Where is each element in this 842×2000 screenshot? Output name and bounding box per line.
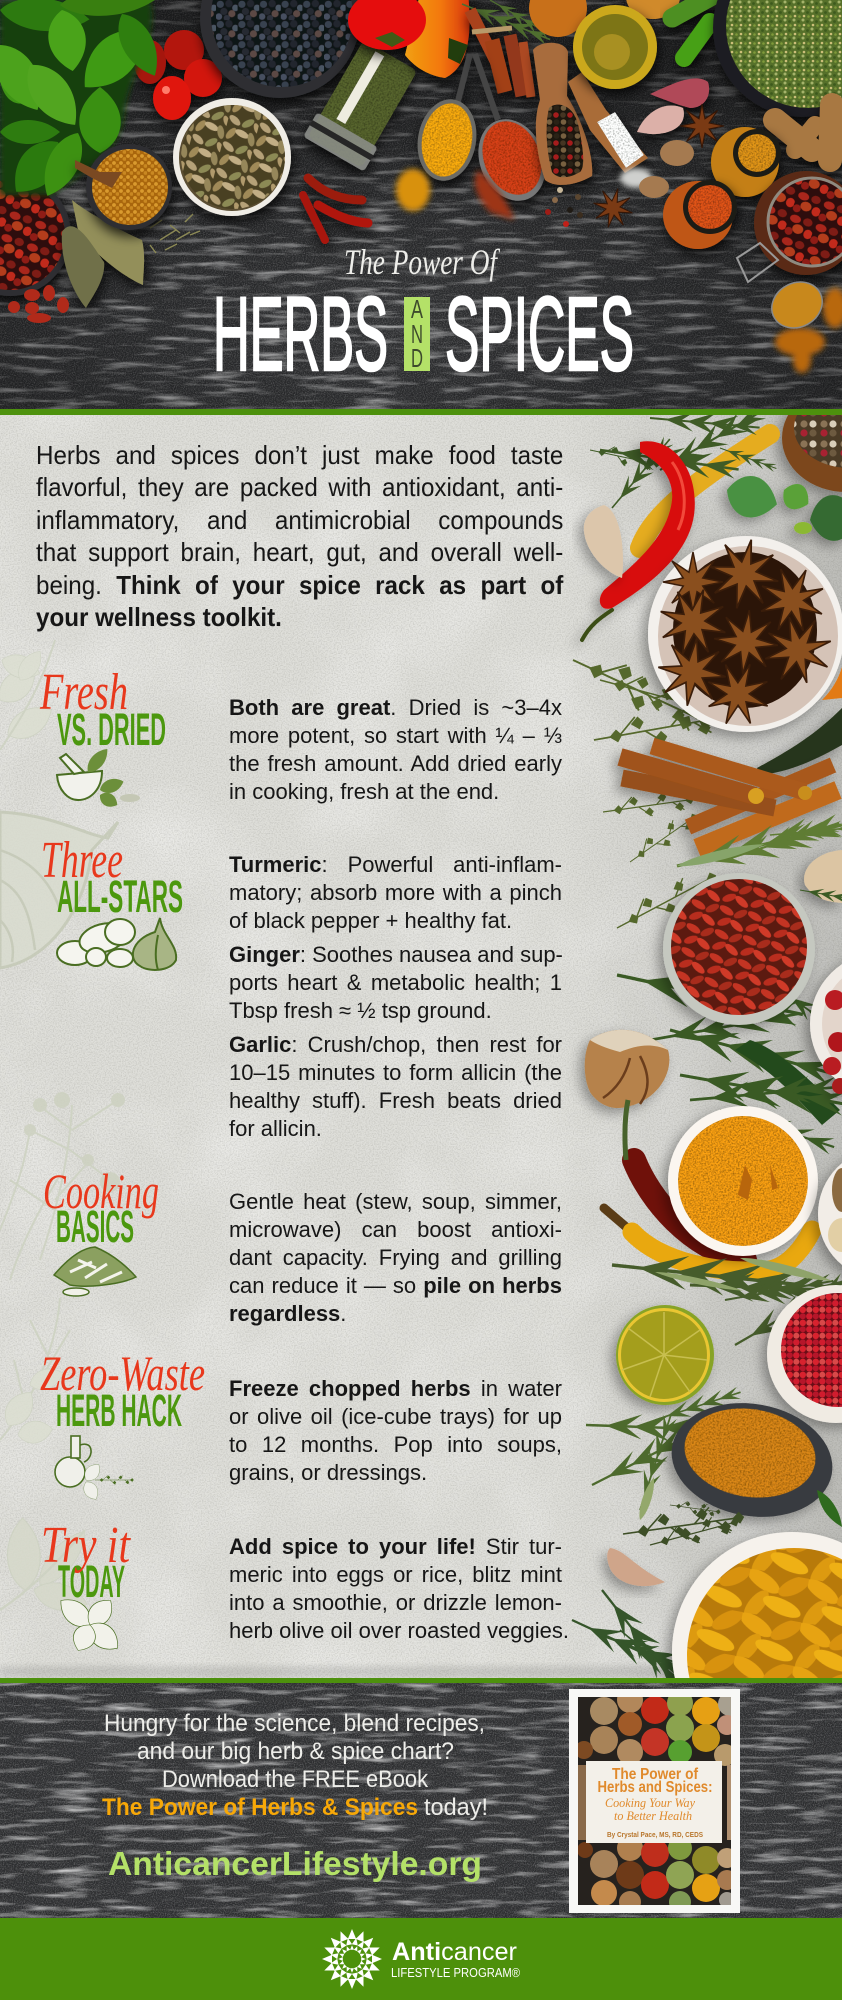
loose salt (620, 168, 652, 188)
mustard seed bowl (75, 144, 172, 230)
photo: glass bowl of goji berries (663, 873, 815, 1025)
photo: white bowl with ginger, right edge (818, 1148, 842, 1280)
text block: cooking basics: regardless. (229, 1301, 346, 1326)
green rule above bottom panel (0, 1678, 842, 1683)
heading: Try it today: Try it (41, 1517, 131, 1574)
text block: garlic: Garlic: Crush/chop, then rest for (229, 1032, 562, 1057)
heading: Zero-Waste herb hack: HERB HACK (56, 1385, 182, 1436)
photo: white bowl of turmeric root (660, 1530, 842, 1678)
panel: footer green bar (0, 1918, 842, 2000)
bay leaves (62, 200, 144, 308)
heading: Try it today (41, 1517, 131, 1607)
photo: pink peppercorn bowl (767, 1285, 842, 1423)
photo: dark dish with golden spice (663, 1391, 841, 1529)
heading: Cooking basics (43, 1163, 159, 1252)
photo group: header spices (0, 0, 842, 373)
title badge: AND: D (411, 343, 423, 373)
heading: Three all-stars (41, 832, 183, 922)
photo: cinnamon sticks (620, 746, 838, 848)
call to action text: Download the FREE eBook (162, 1766, 429, 1793)
call to action text (102, 1710, 488, 1821)
pistachio bowl (173, 98, 291, 216)
icon: oil bottle with herbs (55, 1436, 134, 1503)
text block: zero-waste herb hack: grains, or dressings. (229, 1460, 427, 1485)
text block: fresh vs dried: more potent, so start with ¼ – ⅓ (229, 723, 562, 748)
text block: zero-waste herb hack: to 12 months. Pop into soups, (229, 1432, 562, 1457)
text block: ginger: Tbsp fresh ≈ ½ tsp ground. (229, 998, 492, 1023)
photo: lime half (616, 1305, 714, 1405)
cover text: The Power of (612, 1766, 699, 1783)
cover text: Herbs and Spices: (598, 1779, 712, 1796)
spoon of paprika (472, 53, 550, 212)
heading: Three all-stars: Three (41, 832, 123, 889)
photo: thyme sprigs (565, 644, 727, 940)
heading: Cooking basics: Cooking (43, 1163, 159, 1219)
panel: slate header background (0, 0, 842, 409)
icon: pile of seeds (54, 1247, 136, 1296)
photo: dark cucumber (757, 708, 842, 775)
website link: AnticancerLifestyle.org (108, 1845, 482, 1882)
text block: zero-waste herb hack (229, 1376, 562, 1485)
photo: rosemary sprig across cinnamon (673, 808, 842, 882)
ebook cover (569, 1687, 742, 1913)
photo: herb sprigs and yellow chili, top (588, 400, 778, 548)
intro paragraph (36, 440, 564, 632)
heading: Fresh vs. Dried (39, 664, 166, 755)
cucumbers (672, 0, 712, 58)
text block: fresh vs dried: Both are great. Dried is ~3–4x (229, 695, 562, 720)
logo: sunburst mark (320, 1927, 384, 1991)
intro paragraph: inflammatory, and antimicrobial compounds (36, 505, 563, 535)
text block: cooking basics: dant capacity. Frying and grilling (229, 1245, 562, 1270)
title: The Power Of: The Power Of (344, 242, 501, 282)
wooden scoop with peppercorns (533, 43, 592, 185)
photo: white bowl with tomatoes, right edge (810, 952, 842, 1096)
small golden spoon and powder (764, 273, 842, 373)
cover text: By Crystal Pace, MS, RD, CEDS (607, 1832, 703, 1839)
intro paragraph: flavorful, they are packed with antioxidant, anti- (36, 472, 563, 502)
text block: try it today: herb olive oil over roasted veggies. (229, 1618, 569, 1643)
photo: thyme sprigs, lower (621, 1499, 746, 1555)
red chilies (303, 178, 368, 240)
icon: ginger and garlic (57, 918, 176, 970)
cinnamon bundle (470, 10, 531, 97)
garlic cloves (637, 78, 709, 134)
call to action text: Hungry for the science, blend recipes, (104, 1710, 485, 1737)
ginger root (775, 105, 832, 160)
text block: fresh vs dried: the fresh amount. Add dried early (229, 751, 562, 776)
paprika jar (663, 180, 737, 249)
cover text: to Better Health (614, 1808, 692, 1823)
text block: zero-waste herb hack: or olive oil (ice-cube trays) for up (229, 1404, 562, 1429)
text block: turmeric (229, 852, 562, 933)
wooden scoop with salt (568, 72, 648, 173)
text block: cooking basics: Gentle heat (stew, soup, simmer, (229, 1189, 562, 1214)
intro paragraph: that support brain, heart, gut, and overall well- (36, 537, 563, 567)
text block: garlic: 10–15 minutes to form allicin (the (229, 1060, 562, 1085)
jar of sun-dried tomatoes (737, 171, 842, 282)
photo: mint leaves (721, 470, 842, 543)
rosemary crumbs (150, 214, 200, 253)
cover text (598, 1766, 712, 1839)
photo: red chili pepper (582, 441, 695, 640)
text block: turmeric: Turmeric: Powerful anti-inflam- (229, 852, 562, 877)
watermark: herb sketches (0, 640, 125, 1671)
icon: mortar and pestle with herbs (57, 745, 140, 811)
text block: cooking basics (229, 1189, 562, 1326)
heading: Three all-stars: ALL-STARS (57, 871, 183, 922)
text block: fresh vs dried: in cooking, fresh at the end. (229, 779, 499, 804)
photo: garlic clove (584, 505, 623, 578)
text block: ginger: ports heart & metabolic health; 1 (229, 970, 562, 995)
illustrated background with all photographic elements: VS. DRIED (57, 704, 166, 755)
text block: turmeric: matory; absorb more with a pinch (229, 880, 562, 905)
text block: garlic: for allicin. (229, 1116, 322, 1141)
photo: dark red chili (634, 1160, 745, 1260)
basil leaves (0, 0, 168, 204)
text block: try it today: Add spice to your life! Stir tur- (229, 1534, 562, 1559)
panel: bottom slate (0, 1683, 842, 1918)
illustrated background with all photographic elements: TODAY (58, 1556, 125, 1607)
red spice bowl (0, 174, 71, 296)
heading: Cooking basics: BASICS (56, 1201, 134, 1252)
spoon of turmeric (411, 54, 483, 185)
loose peppercorns (545, 187, 583, 227)
title badge: AND: N (411, 319, 423, 349)
photo: rosemary by dark dish (586, 1384, 743, 1521)
photo: rosemary under goji bowl (613, 884, 842, 1158)
pumpkins (529, 0, 680, 37)
cover text: Cooking Your Way (605, 1795, 695, 1810)
text block: zero-waste herb hack: Freeze chopped herbs in water (229, 1376, 562, 1401)
photo: rosemary under turmeric (610, 1246, 842, 1356)
text block: turmeric: of black pepper + healthy fat. (229, 908, 512, 933)
intro paragraph: being. Think of your spice rack as part of (36, 570, 563, 600)
photo: leaf at right edge (817, 1490, 842, 1527)
text block: cooking basics: can reduce it — so pile on herbs (229, 1273, 562, 1298)
icon: mint sprig (54, 1592, 125, 1657)
call to action text: The Power of Herbs & Spices (102, 1794, 418, 1821)
photo: white bowl of star anise (648, 532, 842, 736)
bowl of olive oil (573, 5, 657, 89)
nutmegs (639, 140, 694, 198)
intro paragraph: your wellness toolkit. (36, 602, 282, 632)
illustrated background with all photographic elements: HERBS (213, 276, 388, 393)
heading: Zero-Waste herb hack: Zero-Waste (40, 1345, 205, 1401)
logo: Anticancer wordmark: Anticancer (392, 1938, 517, 1966)
title badge: AND (404, 294, 430, 373)
big bowl of green herbs (713, 0, 842, 117)
text block: ginger: Ginger: Soothes nausea and sup- (229, 942, 563, 967)
photo: orange chili behind anise bowl (822, 667, 842, 700)
black berry bowl (200, 0, 360, 98)
heading: Zero-Waste herb hack (40, 1345, 205, 1436)
photo: garlic head (585, 1030, 669, 1108)
tomatoes (134, 30, 222, 120)
text block: cooking basics: microwave) can boost antioxi- (229, 1217, 562, 1242)
text block: garlic (229, 1032, 562, 1141)
illustrated background with all photographic elements: SPICES (445, 276, 634, 393)
photo: top-right wooden bowl of peppercorns (782, 384, 842, 492)
photo: green stem of chili (625, 1100, 628, 1160)
photo: rosemary, bottom left (567, 1582, 697, 1700)
red and orange bell pepper (348, 0, 470, 78)
logo: Anticancer wordmark (391, 1938, 520, 1980)
text block: try it today: into a smoothie, or drizzle lemon- (229, 1590, 562, 1615)
rosemary sprig top (462, 0, 550, 44)
intro paragraph: Herbs and spices don’t just make food taste (36, 440, 563, 470)
photo: garlic clove, lower (607, 1548, 665, 1586)
glass spice jar (303, 38, 421, 172)
panel: paper background (0, 415, 842, 1678)
call to action text: and our big herb & spice chart? (137, 1738, 454, 1765)
heading: Fresh vs. Dried: Fresh (39, 664, 128, 721)
text block: ginger (229, 942, 563, 1023)
call to action text: today! (424, 1794, 488, 1821)
text block: garlic: healthy stuff). Fresh beats dried (229, 1088, 562, 1113)
star anise (589, 104, 724, 232)
loose dried berries (8, 285, 69, 323)
turmeric jar (711, 127, 781, 197)
text block: try it today (229, 1534, 569, 1643)
text block: fresh vs dried (229, 695, 562, 804)
photo: turmeric ramekin (668, 1106, 818, 1256)
cover spice bowls (575, 1687, 742, 1913)
text block: try it today: meric into eggs or rice, blitz mint (229, 1562, 562, 1587)
green header rule (0, 409, 842, 415)
photo: garlic piece, right (804, 850, 842, 903)
photo: yellow chili (604, 1208, 812, 1271)
logo: Anticancer wordmark: LIFESTYLE PROGRAM® (391, 1965, 520, 1980)
title badge: AND: A (411, 294, 423, 324)
turmeric and paprika powder (396, 169, 514, 220)
